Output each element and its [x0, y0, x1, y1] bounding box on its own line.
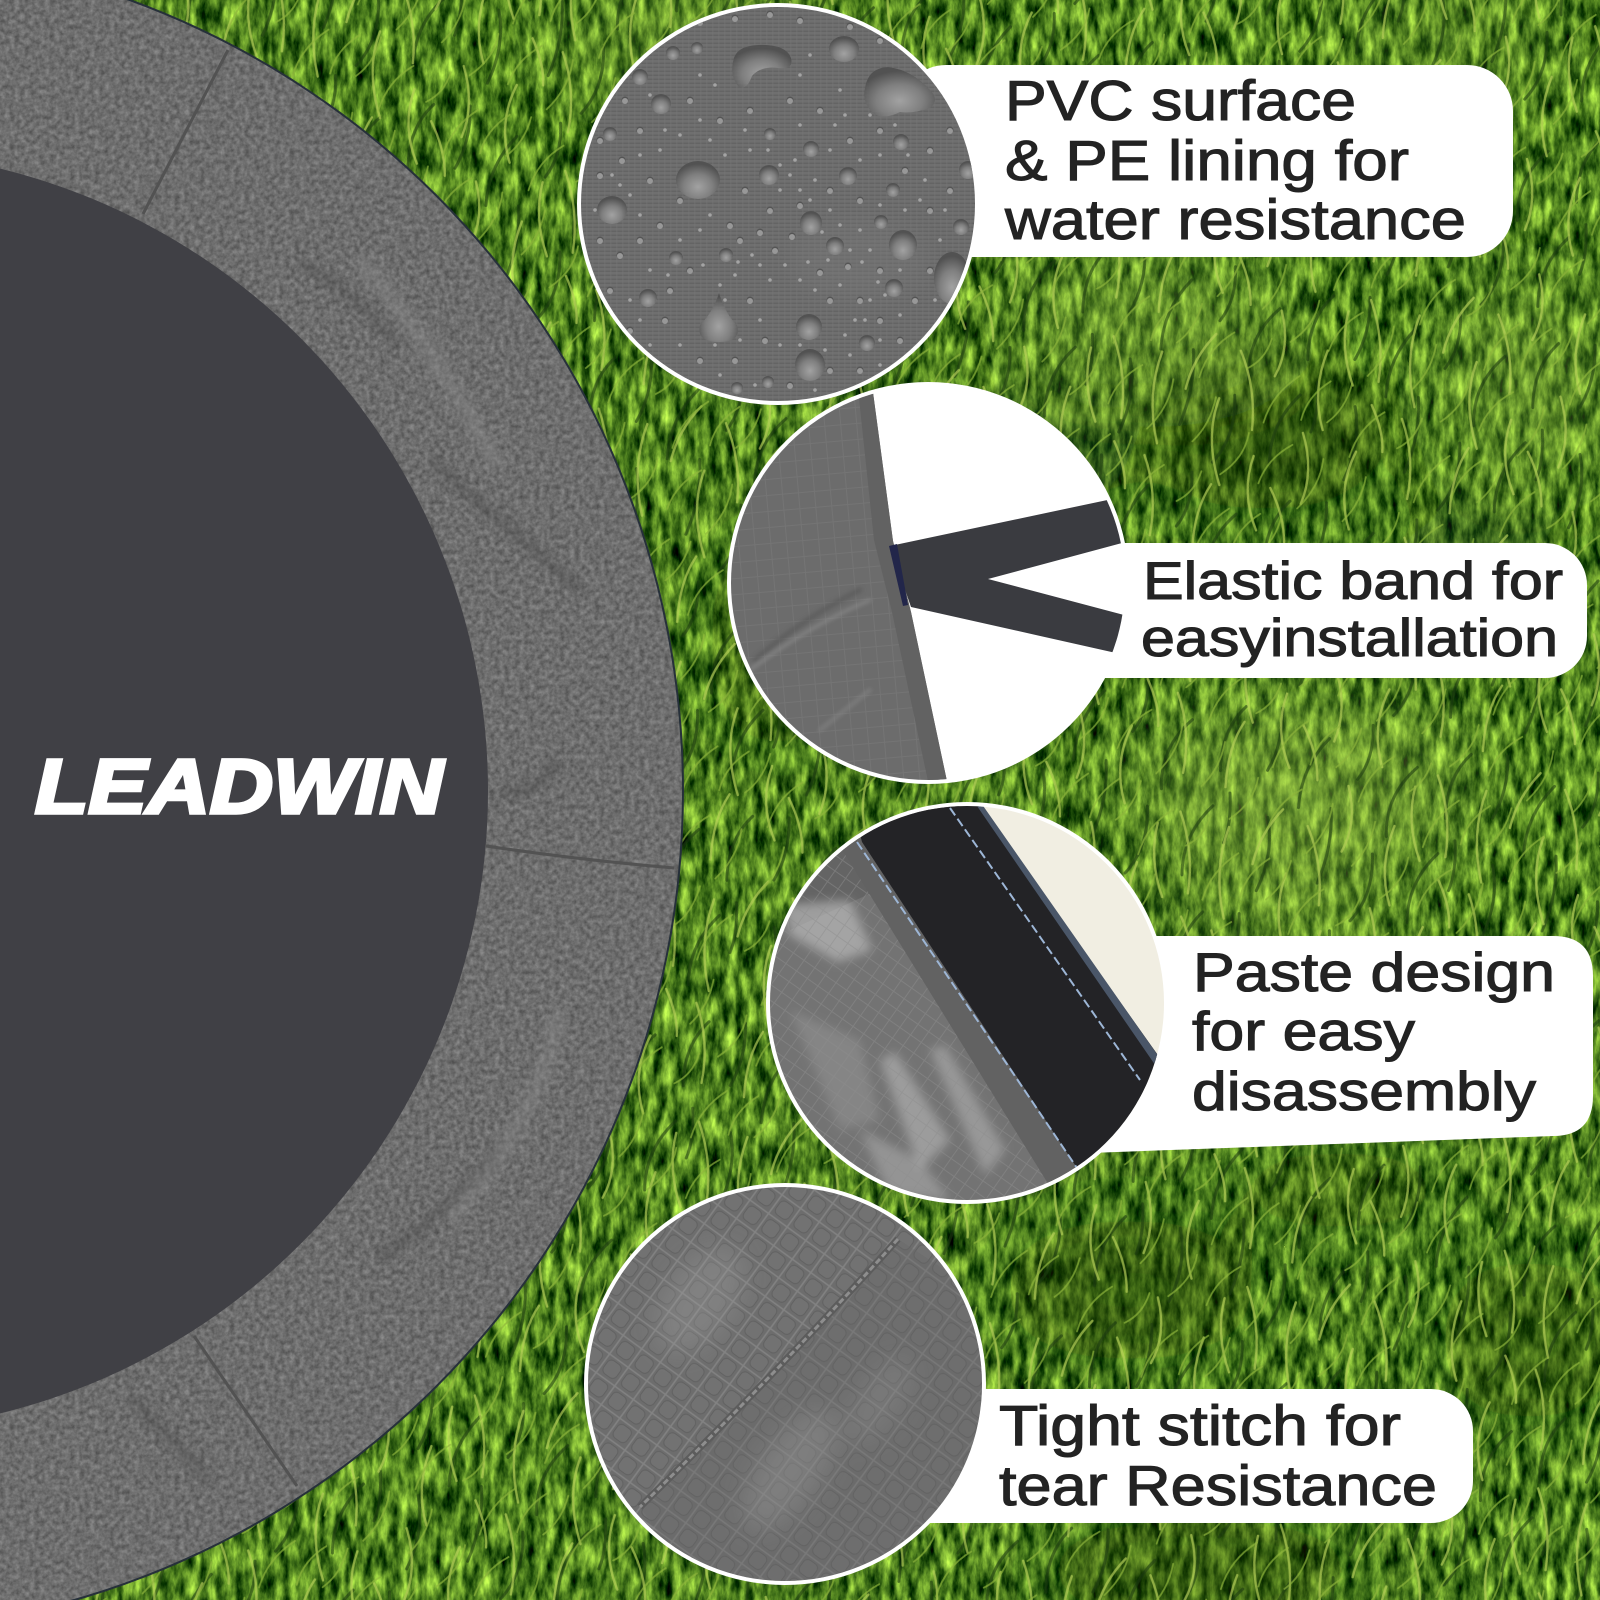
label text: PVC surface	[1005, 69, 1356, 133]
label text: Tight stitch for	[999, 1394, 1401, 1458]
label background	[1090, 936, 1593, 1153]
detail circle: stitched seam	[580, 1180, 990, 1590]
label text: disassembly	[1192, 1060, 1537, 1122]
label text: & PE lining for	[1005, 129, 1409, 193]
label text	[1004, 69, 1466, 252]
label background	[900, 65, 1513, 257]
label text	[1141, 552, 1563, 668]
callout: tight stitch	[580, 1180, 1473, 1590]
label text: Elastic band for	[1143, 552, 1563, 611]
panel seams	[143, 50, 674, 1486]
detail circle: water droplets on PVC	[575, 0, 985, 410]
detail circle: elastic straps	[725, 370, 1129, 800]
jumping mat	[0, 150, 488, 1432]
trampoline	[0, 0, 684, 1600]
label text	[1192, 941, 1555, 1122]
label text: tear Resistance	[999, 1454, 1437, 1518]
label text: for easy	[1192, 1000, 1416, 1062]
label background	[1040, 543, 1587, 678]
detail circle: hook-and-loop strip	[760, 790, 1170, 1215]
label text: water resistance	[1004, 188, 1466, 252]
label text: easyinstallation	[1141, 609, 1558, 668]
logo: LEADWIN	[35, 744, 445, 830]
label text: Paste design	[1193, 941, 1555, 1003]
label background	[880, 1389, 1473, 1523]
callout: elastic band	[725, 370, 1587, 800]
trampoline padded ring	[0, 0, 684, 1600]
callout: paste design	[760, 790, 1593, 1215]
label text	[999, 1394, 1437, 1518]
callout: water resistance	[575, 0, 1513, 410]
